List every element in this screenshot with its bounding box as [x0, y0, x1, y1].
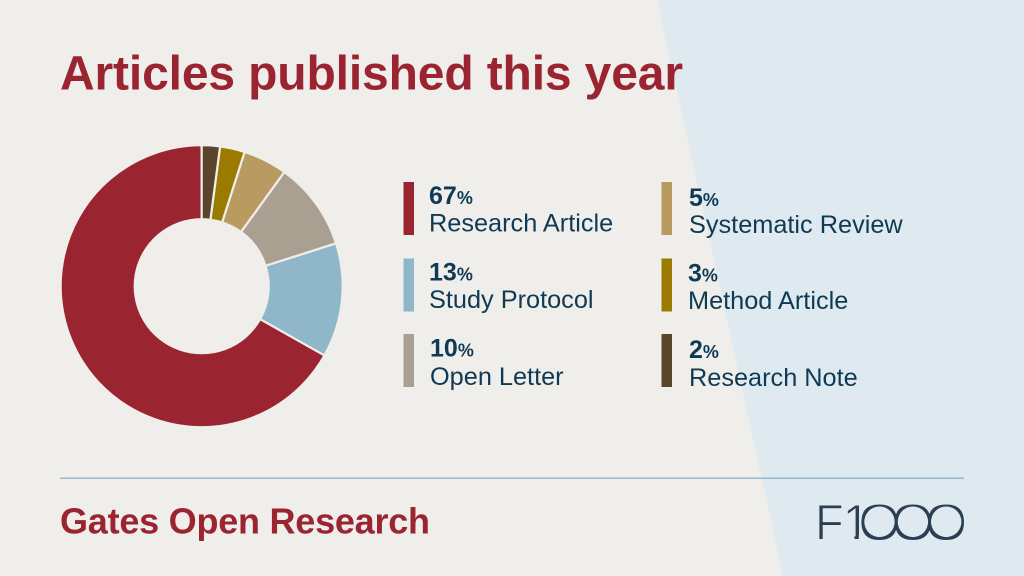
logo: F1000	[815, 494, 967, 551]
legend item: Research Article: Research Article	[429, 210, 613, 238]
legend item: Research Article	[404, 182, 613, 238]
legend	[404, 182, 903, 392]
slice: Method Article 3%	[210, 146, 245, 222]
slice: Open Letter 10%	[241, 172, 336, 266]
slice: Systematic Review 5%	[222, 152, 284, 232]
slice: Research Note 2%	[202, 145, 220, 220]
logo: F1000: 1	[842, 494, 870, 550]
footer journal name: Gates Open Research	[60, 500, 430, 542]
logo: F1000: F	[815, 495, 844, 551]
legend item: Systematic Review: Systematic Review	[689, 211, 903, 239]
legend item: Study Protocol	[404, 258, 594, 314]
legend item: Research Article: 67%	[429, 182, 473, 210]
logo: F1000: 0	[892, 494, 934, 550]
legend item: Open Letter	[404, 334, 564, 391]
donut chart	[61, 145, 343, 427]
legend item: Open Letter: Open Letter	[430, 363, 564, 391]
legend item: Method Article: Method Article	[688, 287, 848, 315]
legend item: Systematic Review	[662, 182, 903, 239]
logo: F1000: 0	[858, 494, 900, 550]
legend item: Study Protocol: Study Protocol	[429, 286, 594, 314]
legend item: Method Article: 3%	[688, 260, 718, 288]
legend item: Study Protocol: 13%	[429, 258, 473, 286]
legend item: Method Article	[662, 258, 848, 315]
legend item: Systematic Review: 5%	[689, 184, 719, 212]
legend item: Research Note: Research Note	[689, 364, 858, 392]
legend item: Research Note	[662, 334, 858, 392]
legend item: Research Note: 2%	[689, 336, 719, 364]
title: Articles published this year	[60, 48, 683, 100]
logo: F1000: 0	[925, 494, 967, 550]
legend item: Open Letter: 10%	[430, 334, 474, 362]
slice: Study Protocol 13%	[260, 243, 343, 355]
slice: Research Article 67%	[61, 145, 325, 427]
